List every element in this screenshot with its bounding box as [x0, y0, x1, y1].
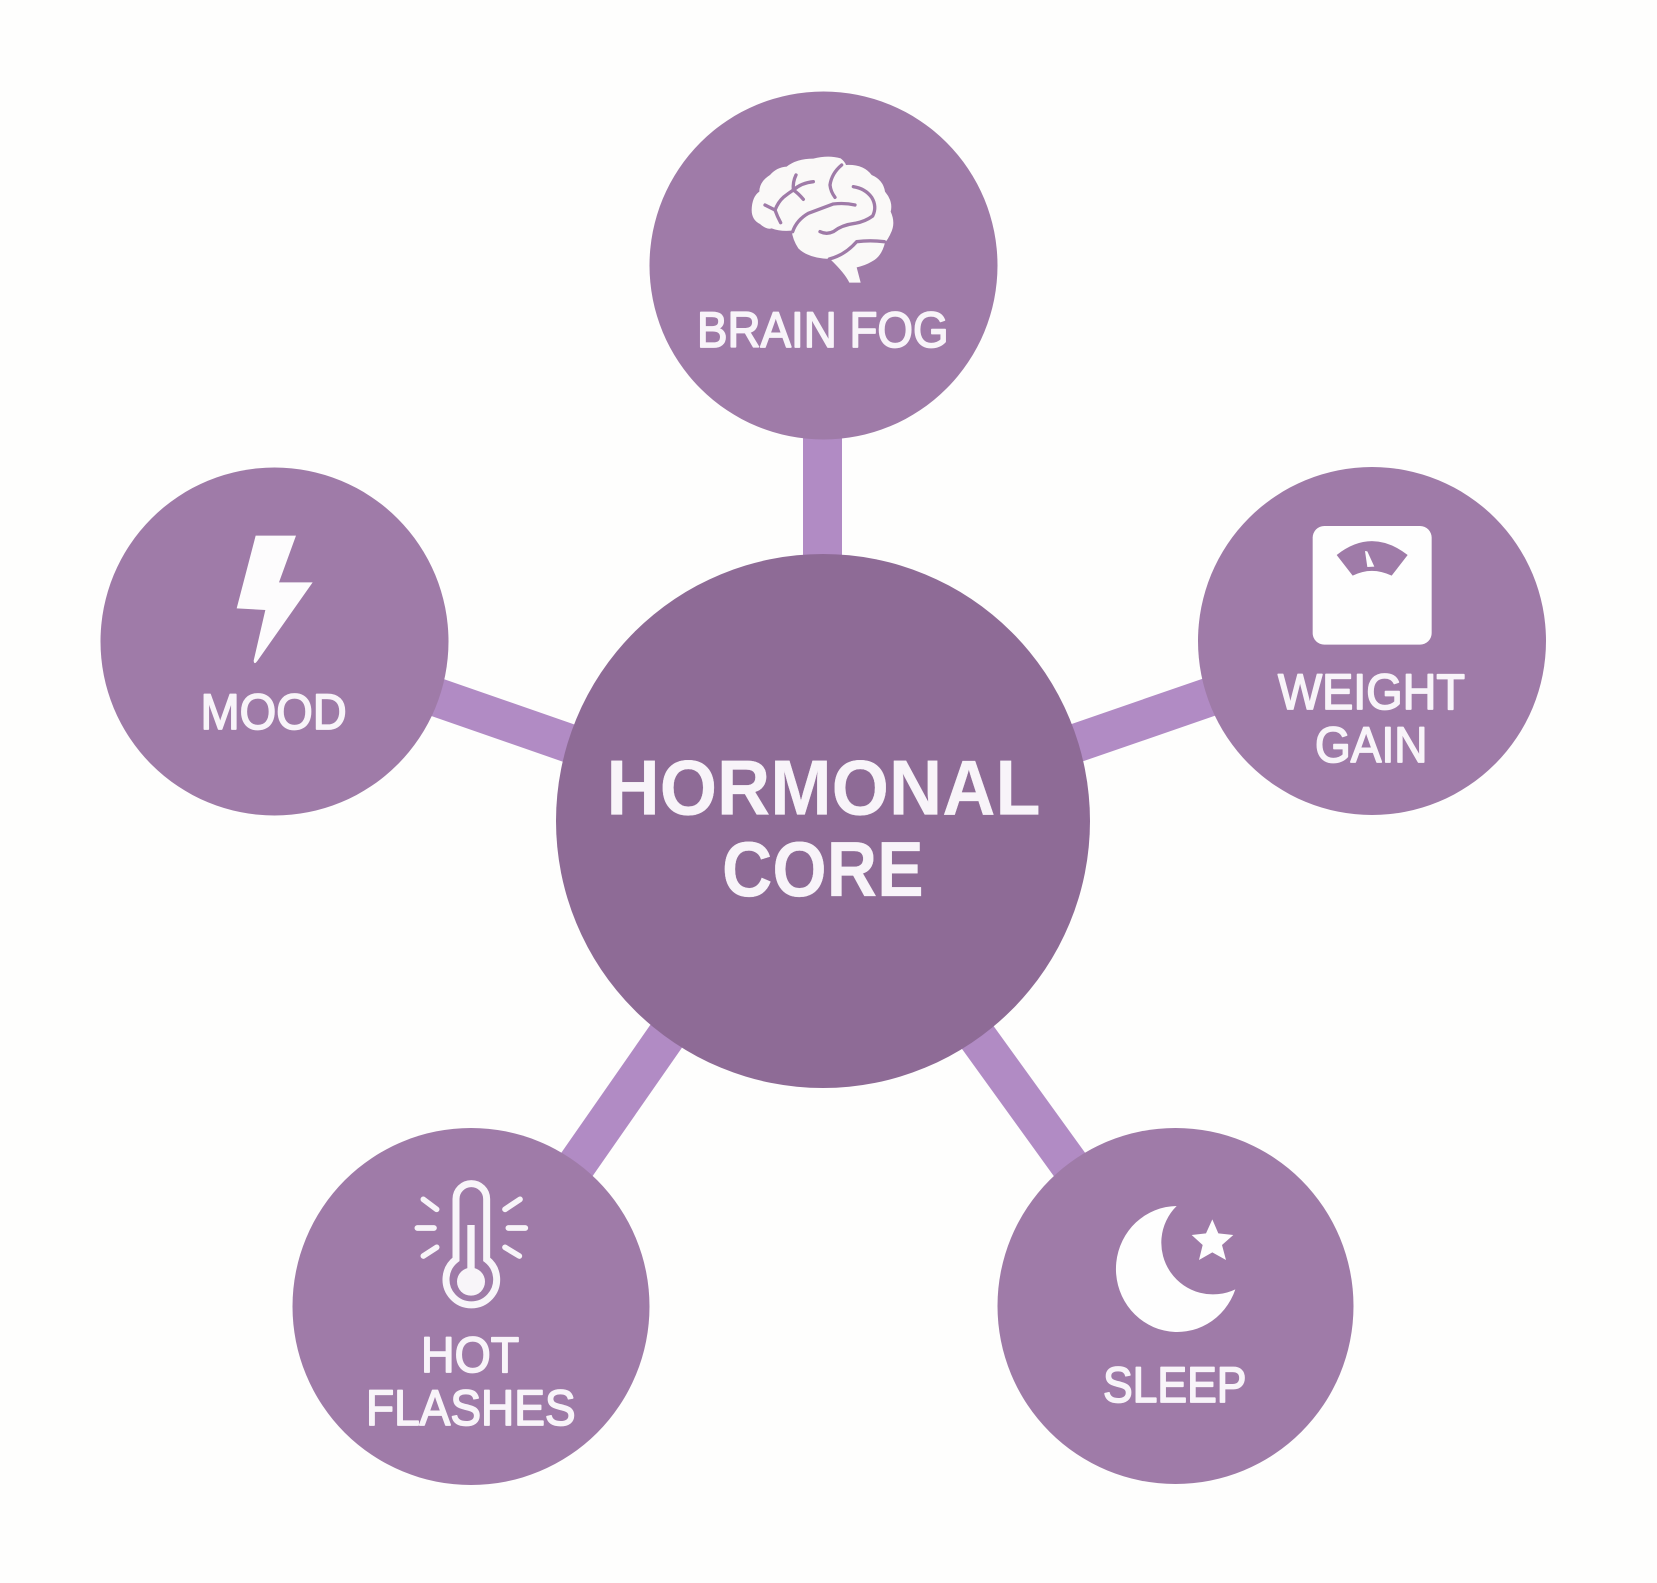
heading: core: CORE: [722, 825, 924, 913]
label: brain fog: BRAIN FOG: [697, 303, 949, 358]
connector: hot flashes to core: [540, 1002, 690, 1218]
weight gain circle: [1198, 467, 1546, 815]
label: mood: MOOD: [200, 685, 347, 740]
panel: sleep: [998, 1128, 1354, 1484]
mood circle: [100, 468, 448, 816]
panel: mood: [100, 468, 448, 816]
icon: lightning bolt: [237, 536, 313, 663]
panel: hormonal core: [556, 554, 1090, 1088]
label: gain: GAIN: [1315, 718, 1427, 773]
connector: brain fog to core: [803, 420, 842, 580]
label: hot: HOT: [421, 1327, 519, 1383]
core circle: [556, 554, 1090, 1088]
label: flashes: FLASHES: [366, 1381, 576, 1436]
connectors: [400, 420, 1250, 1218]
hot flashes circle: [292, 1128, 650, 1485]
icon: scale: [1313, 526, 1432, 645]
connector: mood to core: [400, 684, 600, 754]
sleep circle: [998, 1128, 1354, 1484]
panel: weight gain: [1198, 467, 1546, 815]
panel: hot flashes: [292, 1128, 650, 1485]
icon: thermometer: [417, 1184, 525, 1305]
icon: moon and star: [1116, 1206, 1235, 1332]
connector: weight gain to core: [1040, 683, 1250, 756]
heading: hormonal: HORMONAL: [606, 745, 1040, 832]
icon: brain: [752, 157, 893, 283]
label: sleep: SLEEP: [1103, 1358, 1246, 1414]
brain fog circle: [650, 92, 998, 440]
label: weight: WEIGHT: [1278, 665, 1465, 720]
panel: brain fog: [650, 92, 998, 440]
connector: sleep to core: [950, 999, 1105, 1214]
